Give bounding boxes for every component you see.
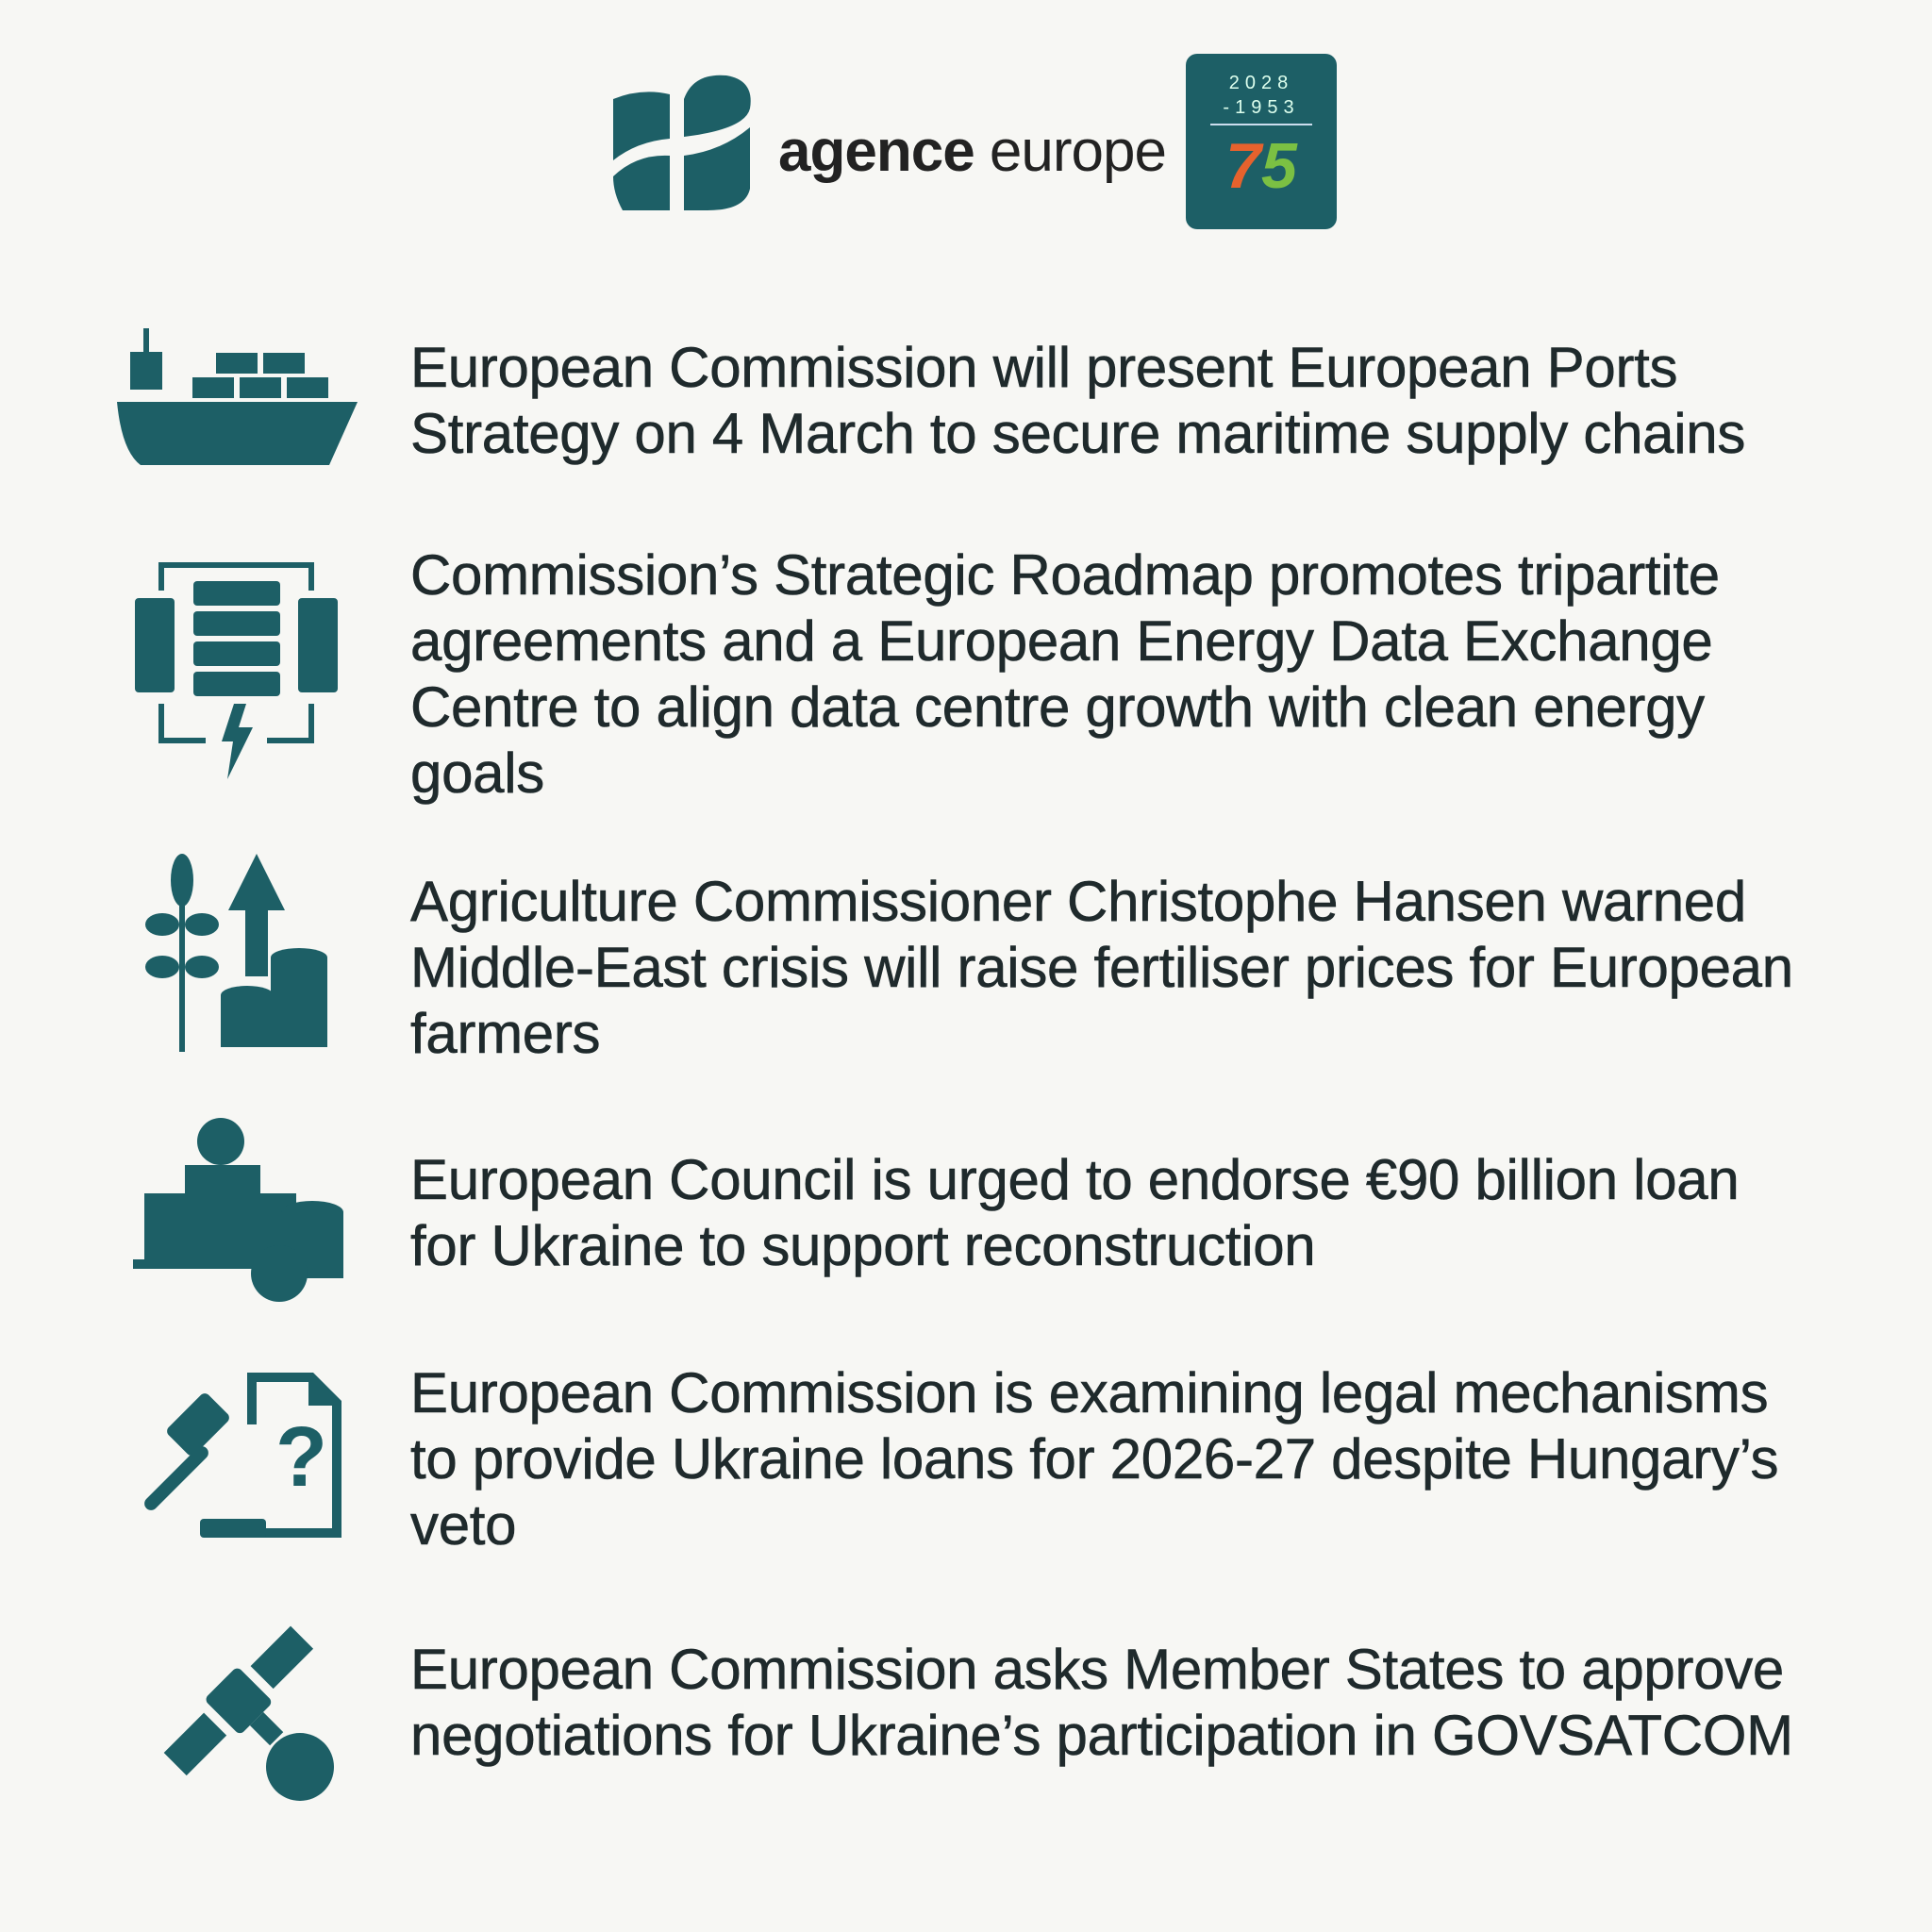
icon: data centre	[135, 562, 338, 779]
text: legal mechanisms	[409, 1361, 1778, 1557]
text: Ukraine loan: for Ukraine to support reconstruction	[410, 1214, 1315, 1277]
text: GOVSATCOM: negotiations for Ukraine’s participation in GOVSATCOM	[410, 1704, 1793, 1767]
text: data centres: agreements and a European Energy Data Exchange	[410, 609, 1712, 673]
logo text: agence europe	[778, 119, 1166, 184]
icon: gavel and document	[144, 1373, 341, 1538]
text: legal mechanisms: European Commission is examining legal mechanisms	[410, 1361, 1768, 1424]
badge 75 years: 2028	[1229, 73, 1293, 93]
text: ports: Strategy on 4 March to secure maritime supply chains	[410, 402, 1745, 465]
text: fertiliser: Middle-East crisis will raise fertiliser prices for European	[410, 936, 1793, 999]
icon: gavel and document: ?	[275, 1410, 327, 1505]
text: GOVSATCOM: European Commission asks Member States to approve	[410, 1638, 1784, 1701]
text: ports: European Commission will present European Ports	[410, 336, 1677, 399]
text: legal mechanisms: veto	[410, 1493, 516, 1557]
icon: building with euro coins	[133, 1118, 343, 1302]
text: data centres: goals	[410, 741, 544, 805]
text: data centres	[410, 543, 1720, 805]
text: Ukraine loan	[410, 1148, 1739, 1277]
text: data centres: Centre to align data centre growth with clean energy	[410, 675, 1705, 739]
icon: ship	[117, 328, 358, 465]
badge 75 years: 75	[1225, 130, 1297, 202]
text: Ukraine loan: European Council is urged to endorse €90 billion loan	[410, 1148, 1739, 1211]
text: GOVSATCOM	[410, 1638, 1793, 1767]
text: legal mechanisms: to provide Ukraine loans for 2026-27 despite Hungary’s	[410, 1427, 1778, 1491]
text: fertiliser	[409, 870, 1793, 1065]
badge 75 years	[1186, 54, 1337, 229]
badge 75 years: -1953	[1223, 97, 1300, 118]
text: data centres: Commission’s Strategic Roadmap promotes tripartite	[410, 543, 1720, 607]
text: fertiliser: farmers	[410, 1002, 600, 1065]
text: ports	[410, 336, 1745, 465]
icon: wheat and coins	[145, 854, 327, 1052]
logo mark	[613, 75, 751, 210]
text: fertiliser: Agriculture Commissioner Christophe Hansen warned	[410, 870, 1746, 933]
logo: agence europe	[613, 54, 1337, 229]
icon: satellite and globe	[164, 1626, 334, 1801]
